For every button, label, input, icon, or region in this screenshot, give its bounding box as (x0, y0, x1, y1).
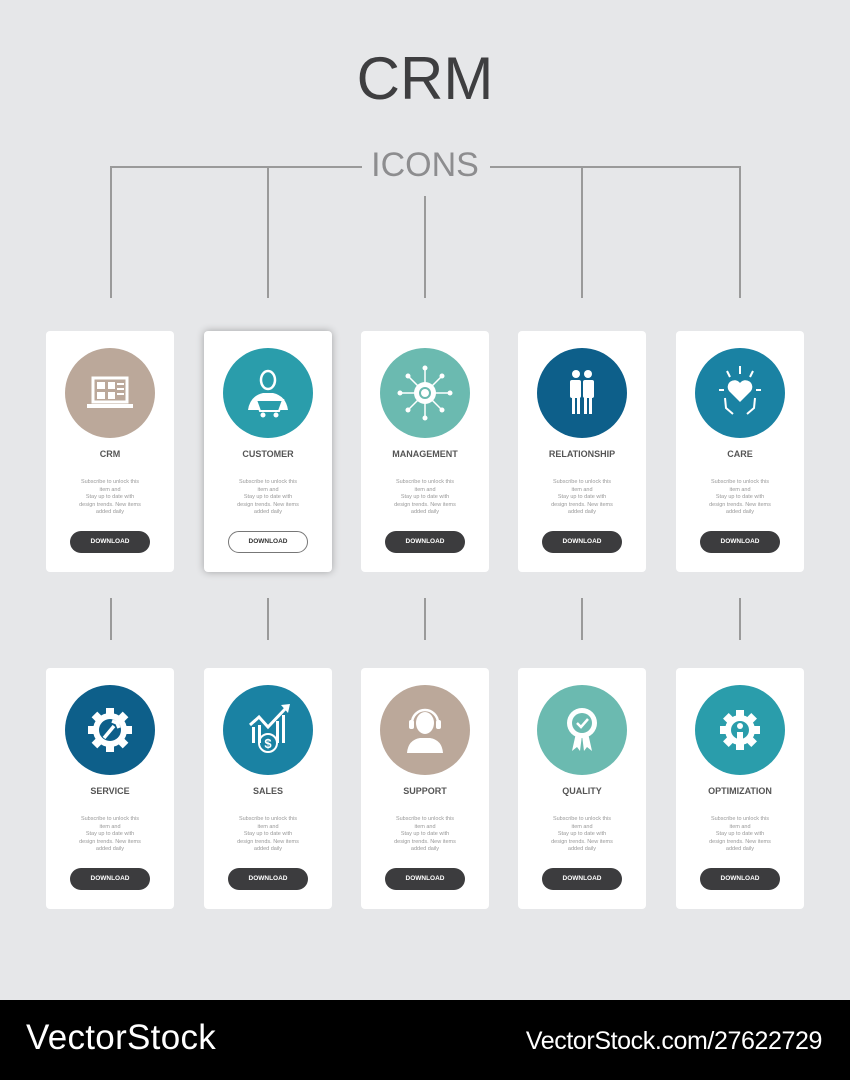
panel: quality: added daily (568, 846, 596, 852)
panel: care: item and (729, 486, 751, 492)
panel: sales: added daily (254, 846, 282, 852)
panel: support: design trends. New items (394, 838, 456, 844)
panel: support: SUPPORT (403, 786, 447, 796)
connector lines (110, 166, 741, 640)
panel: relationship: design trends. New items (551, 502, 613, 508)
panel: care (676, 331, 804, 572)
panel: quality: DOWNLOAD (562, 875, 602, 882)
panel: care: Stay up to date with (716, 494, 764, 500)
panel: management: MANAGEMENT (392, 449, 458, 459)
footer (0, 1000, 850, 1080)
panel: service: SERVICE (90, 786, 130, 796)
panel: care: CARE (727, 449, 753, 459)
panel: management: Stay up to date with (401, 494, 449, 500)
panel: optimization: added daily (726, 846, 754, 852)
panel: support: DOWNLOAD (406, 875, 444, 882)
panel: customer: Subscribe to unlock this (239, 479, 297, 485)
panel: crm: Subscribe to unlock this (81, 479, 139, 485)
panel: crm: Stay up to date with (86, 494, 134, 500)
panel: management (361, 331, 489, 572)
panel: support: item and (414, 824, 436, 830)
icon: heart in hands (695, 348, 785, 438)
panel: quality: Stay up to date with (558, 831, 606, 837)
panel: service: added daily (96, 846, 124, 852)
panel: support (361, 668, 489, 909)
panel: optimization (676, 668, 804, 909)
panel: optimization: Stay up to date with (716, 831, 764, 837)
panel: service: DOWNLOAD (90, 875, 130, 882)
icon: chart dollar (223, 685, 313, 775)
footer url: VectorStock.com/27622729 (526, 1027, 822, 1055)
panel: customer: DOWNLOAD (248, 538, 288, 545)
panel: customer: item and (257, 486, 279, 492)
panel: sales: design trends. New items (237, 838, 299, 844)
icon: customer (223, 348, 313, 438)
panel: relationship: DOWNLOAD (562, 538, 602, 545)
panel: support: Subscribe to unlock this (396, 816, 454, 822)
panel: support: added daily (411, 846, 439, 852)
panel: relationship: Subscribe to unlock this (553, 479, 611, 485)
panel: relationship: item and (571, 486, 593, 492)
panel: service: Stay up to date with (86, 831, 134, 837)
icon: headset agent (380, 685, 470, 775)
panel: service: design trends. New items (79, 838, 141, 844)
panel: care: Subscribe to unlock this (711, 479, 769, 485)
panel: relationship (518, 331, 646, 572)
panel: relationship: added daily (568, 509, 596, 515)
panel: sales: DOWNLOAD (248, 875, 288, 882)
panel: optimization: Subscribe to unlock this (711, 816, 769, 822)
icon: gear hand (695, 685, 785, 775)
panel: service: Subscribe to unlock this (81, 816, 139, 822)
panel: customer (204, 331, 332, 572)
icon: laptop (65, 348, 155, 438)
panel: quality: Subscribe to unlock this (553, 816, 611, 822)
panel: customer: CUSTOMER (242, 449, 294, 459)
panel: optimization: DOWNLOAD (720, 875, 760, 882)
panel: service (46, 668, 174, 909)
panel: crm (46, 331, 174, 572)
panel: crm: DOWNLOAD (90, 538, 130, 545)
subtitle: ICONS (371, 146, 479, 184)
panel: care: DOWNLOAD (720, 538, 760, 545)
panel: relationship: RELATIONSHIP (549, 449, 615, 459)
panel: management: DOWNLOAD (406, 538, 444, 545)
panel: customer: added daily (254, 509, 282, 515)
panel: sales: SALES (253, 786, 283, 796)
panel: crm: item and (99, 486, 121, 492)
panel: crm: CRM (100, 449, 120, 459)
panel: sales: Subscribe to unlock this (239, 816, 297, 822)
panel: crm: design trends. New items (79, 502, 141, 508)
panel: management: Subscribe to unlock this (396, 479, 454, 485)
footer brand: VectorStock (26, 1018, 216, 1057)
panel: optimization: design trends. New items (709, 838, 771, 844)
panel: crm: added daily (96, 509, 124, 515)
icon: two people (537, 348, 627, 438)
panel: customer: Stay up to date with (244, 494, 292, 500)
panel: quality: QUALITY (562, 786, 602, 796)
panel: management: design trends. New items (394, 502, 456, 508)
icon: gear wrench (65, 685, 155, 775)
title: CRM (357, 45, 493, 112)
panel: sales (204, 668, 332, 909)
panel: customer: design trends. New items (237, 502, 299, 508)
panel: management: added daily (411, 509, 439, 515)
panel: support: Stay up to date with (401, 831, 449, 837)
icon: network gear (380, 348, 470, 438)
panel: optimization: OPTIMIZATION (708, 786, 772, 796)
panel: care: design trends. New items (709, 502, 771, 508)
panel: quality: item and (571, 824, 593, 830)
icon: chart dollar: $ (264, 736, 272, 751)
panel: sales: item and (257, 824, 279, 830)
panel: quality (518, 668, 646, 909)
panel: quality: design trends. New items (551, 838, 613, 844)
panel: optimization: item and (729, 824, 751, 830)
panel: care: added daily (726, 509, 754, 515)
panel: service: item and (99, 824, 121, 830)
panel: relationship: Stay up to date with (558, 494, 606, 500)
panel: management: item and (414, 486, 436, 492)
panel: sales: Stay up to date with (244, 831, 292, 837)
icon: badge (537, 685, 627, 775)
